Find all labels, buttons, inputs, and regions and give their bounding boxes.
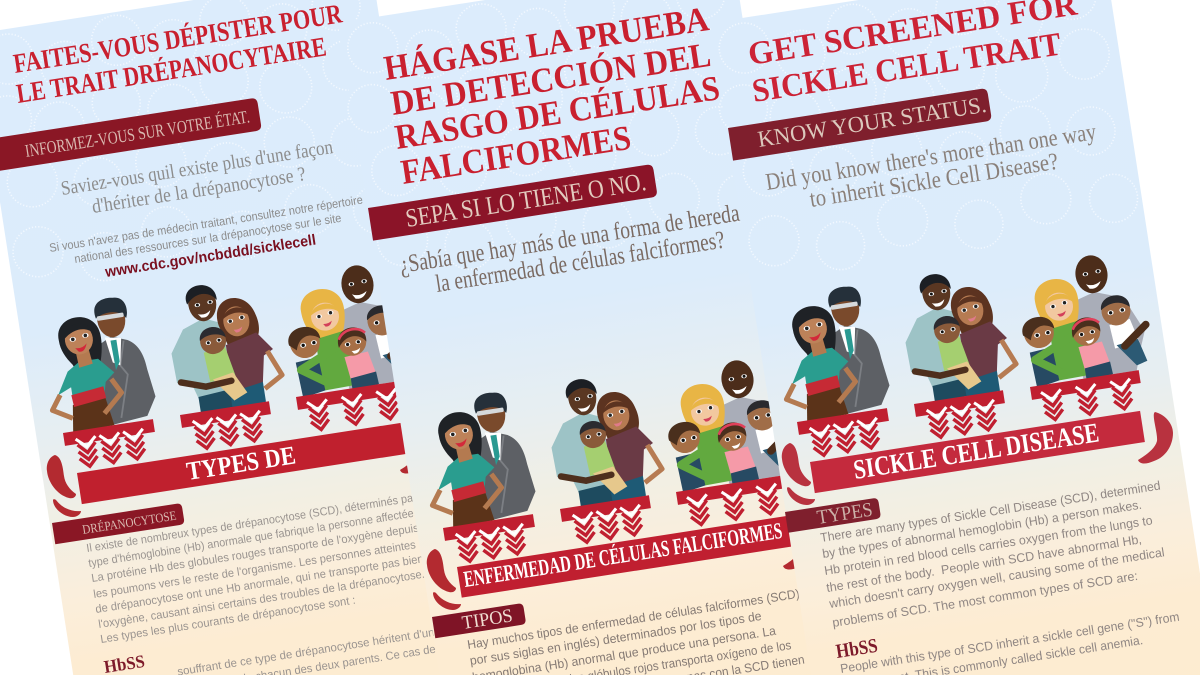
section tag: types: [785, 498, 881, 533]
body text: French: l'oxygène, causant ainsi certains des troubles de la drépanocytose.: [98, 569, 426, 631]
subtitle bar: KNOW YOUR STATUS.: [756, 92, 988, 152]
question text: [59, 136, 335, 218]
body text: French: de drépanocytose ont une Hb anormale, qui ne transporte pas bien: [95, 553, 425, 616]
question text: to inherit Sickle Cell Disease?: [808, 149, 1060, 213]
body text: French: [86, 492, 426, 646]
title: Spanish: FALCIFORMES: [398, 118, 633, 192]
resource note and link: [48, 193, 364, 281]
panel: Spanish poster: [335, 0, 856, 675]
icon: sickle cells: [782, 412, 1173, 505]
title: Spanish: RASGO DE CÉLULAS: [392, 68, 722, 157]
resource note and link: Si vous n'avez pas de médecin traitant, consultez notre répertoire: [48, 193, 364, 255]
question text: la enfermedad de células falciformes?: [434, 227, 726, 298]
body text: French: Les types les plus courants de drépanocytose sont :: [100, 595, 356, 646]
subtitle bar: [0, 98, 262, 172]
family illustration: parents with three children: [1011, 248, 1158, 423]
title: English: SICKLE CELL TRAIT: [750, 27, 1064, 110]
banner: enfermedad de células falciformes: [457, 516, 793, 598]
question text: ¿Sabía que hay más de una forma de heredar: [398, 199, 748, 279]
family illustration: couple: [417, 388, 545, 566]
subtitle bar: SEPA SI LO TIENE O NO.: [403, 167, 648, 233]
banner: sickle cell disease: SICKLE CELL DISEASE: [851, 416, 1101, 485]
body text: English: by the types of abnormal hemoglobin (Hb) a person makes.: [821, 498, 1143, 561]
subtitle bar: [368, 164, 658, 241]
family illustration: parents with baby: [895, 264, 1025, 441]
family illustration: parents with baby: [161, 275, 291, 452]
body text: English: the rest of the body. People with SCD have abnormal Hb,: [825, 532, 1143, 595]
section tag: types: TYPES: [815, 499, 874, 529]
poster background: [335, 0, 856, 675]
banner: enfermedad de células falciformes: ENFERMEDAD DE CÉLULAS FALCIFORMES: [462, 518, 784, 592]
resource note and link: national des ressources sur la drépanocytose sur le site: [73, 211, 343, 266]
section tag: tipos: TIPOS: [461, 605, 514, 634]
body text: Spanish: por sus siglas en inglés) determinados por los tipos de: [469, 609, 763, 668]
icon: sickle cells: [47, 422, 435, 517]
question text: d'hériter de la drépanocytose ?: [90, 163, 307, 218]
subtitle bar: INFORMEZ-VOUS SUR VOTRE ÉTAT.: [23, 105, 251, 161]
section tag: drépanocytose: DRÉPANOCYTOSE: [81, 508, 177, 537]
body text: Spanish: Hay muchos tipos de enfermedad de células falciformes (SCD): [466, 587, 801, 652]
heading: HbSS English: HbSS: [834, 635, 879, 663]
family illustration: parents with baby: [541, 369, 671, 546]
resource note and link: www.cdc.gov/ncbddd/sicklecell: [103, 232, 317, 281]
panel: French poster: [0, 0, 495, 675]
question text: Did you know there's more than one way: [764, 119, 1098, 196]
body text: English: [819, 478, 1165, 630]
poster background: [0, 0, 495, 675]
icon: sickle cells: [427, 518, 818, 610]
title: Spanish: [381, 0, 722, 192]
question text: [398, 199, 748, 298]
body text: HbSS English: People with this type of SCD inherit a sickle cell gene ("S") from: [839, 610, 1180, 675]
title: French: LE TRAIT DRÉPANOCYTAIRE: [14, 30, 328, 109]
body text: French: Il existe de nombreux types de drépanocytose (SCD), déterminés par: [86, 492, 418, 555]
body text: English: problems of SCD. The most common types of SCD are:: [831, 569, 1139, 630]
section tag: tipos: [432, 603, 526, 638]
family illustration: couple: [37, 293, 165, 471]
banner: types de: TYPES DE: [184, 440, 298, 486]
panel: English poster: [706, 0, 1200, 675]
body text: English: There are many types of Sickle Cell Disease (SCD), determined: [819, 478, 1161, 545]
body text: French: les poumons vers le reste de l'organisme. Les personnes atteintes: [93, 539, 417, 601]
banner: types de: [77, 421, 418, 504]
family illustration: parents with three children: [657, 353, 804, 528]
section tag: drépanocytose: [52, 503, 185, 544]
poster background: [706, 0, 1200, 675]
body text: French: type d'hémoglobine (Hb) anormale que fabrique la personne affectée.: [88, 507, 418, 570]
question text: Saviez-vous quil existe plus d'une façon: [59, 136, 335, 200]
family illustration: parents with three children: [277, 258, 424, 433]
family illustration: couple: [771, 282, 899, 460]
body text: English: which doesn't carry oxygen well, causing some of the medical: [827, 545, 1165, 611]
title: Spanish: DE DETECCIÓN DEL: [388, 34, 713, 123]
body text: French: La protéine Hb des globules rouges transporte de l'oxygène depuis: [91, 522, 420, 585]
question text: [764, 119, 1098, 213]
body text: English: Hb protein in red blood cells carries oxygen from the lungs to: [823, 513, 1154, 578]
